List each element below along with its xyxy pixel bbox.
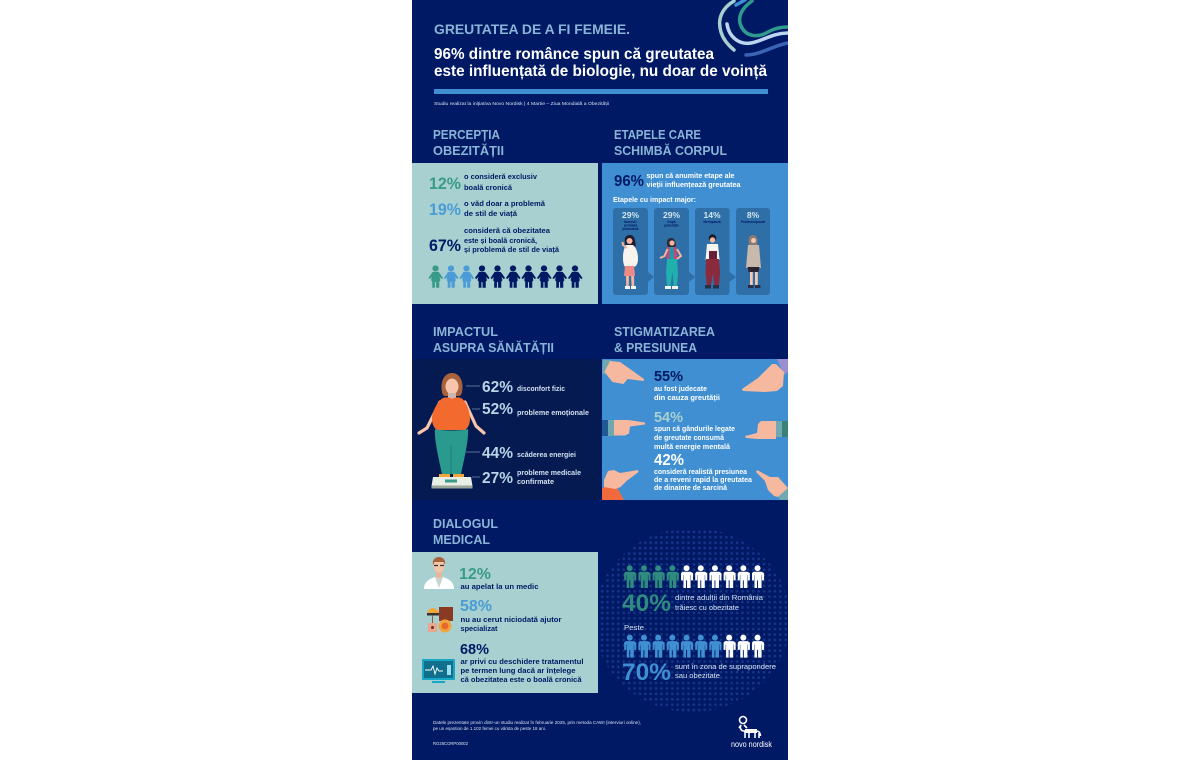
- card: dupa pubertate: După: [668, 220, 676, 224]
- stat 27%: confirmate: [517, 477, 554, 486]
- stat 42%: 42%: [654, 452, 684, 469]
- study note: Studiu realizat la inițiativa Novo Nordisk | 4 Martie – Ziua Mondială a Obezității: [434, 101, 609, 107]
- footer note: RO26CORP00002: [433, 741, 468, 747]
- hand middle right: [745, 421, 788, 439]
- title: GREUTATEA DE A FI FEMEIE.: [434, 22, 630, 37]
- figure: woman on scale: [419, 373, 484, 488]
- heading: impactul asupra sanatatii: IMPACTUL: [433, 324, 498, 339]
- card: menopauza: 14%: [703, 210, 721, 220]
- logo: novo nordisk: [731, 716, 773, 749]
- icon: food: [427, 607, 453, 632]
- stat block: 40% adults with obesity: [622, 565, 764, 617]
- connector lines: [466, 386, 480, 477]
- dotted globe background: [594, 528, 790, 712]
- card: dupa pubertate: 29%: [663, 210, 680, 220]
- stat block: over 70% overweight: 70%: [622, 659, 671, 686]
- panel: etapele: [602, 163, 788, 304]
- heading: etapele care schimba corpul: [614, 127, 727, 158]
- stat block: over 70% overweight: Peste: [624, 623, 644, 632]
- card: dupa pubertate: pubertate: [664, 224, 679, 228]
- stat 67%: [429, 226, 560, 255]
- logo: novo nordisk: novo nordisk: [731, 739, 773, 749]
- footer note: Datele prezentate provin dintr-un studiu realizat în februarie 2025, prin metoda CAWI (interviuri online),: [433, 720, 641, 726]
- stat 19%: 19%: [429, 201, 461, 219]
- stat 54%: multă energie mentală: [654, 442, 731, 451]
- card: sarcina: perioada: [624, 224, 637, 228]
- stat 54%: de greutate consumă: [654, 433, 725, 442]
- stat 68%: că obezitatea este o boală cronică: [460, 675, 582, 684]
- stat 12%: [459, 566, 538, 591]
- subheading: Etapele cu impact major:: [613, 195, 696, 204]
- people row: 4 of 10 green: [624, 565, 764, 588]
- heading: perceptia obezitatii: [433, 127, 504, 158]
- card: sarcina: [613, 208, 648, 295]
- figure: woman with book: [705, 234, 720, 288]
- stat block: 40% adults with obesity: trăiesc cu obezitate: [675, 603, 739, 612]
- stat 54%: [654, 409, 735, 451]
- stat 12%: 12%: [429, 175, 461, 193]
- people row: 7.5 of 10 blue: [624, 635, 764, 658]
- stat 42%: de dinainte de sarcină: [654, 483, 728, 492]
- stat 68%: ar privi cu deschidere tratamentul: [460, 657, 584, 666]
- stat 44%: 44%: [482, 445, 513, 462]
- stat 19%: de stil de viață: [464, 209, 518, 218]
- stat 67%: este și boală cronică,: [464, 236, 537, 245]
- heading: stigmatizarea si presiunea: STIGMATIZAREA: [614, 324, 715, 339]
- icon: doctor: [424, 557, 454, 589]
- card: sarcina: postnatală: [623, 227, 639, 231]
- stat 12%: boală cronică: [464, 183, 513, 192]
- stat 52%: 52%: [482, 401, 513, 418]
- stat 42%: [654, 452, 753, 492]
- heading: etapele care schimba corpul: ETAPELE CARE: [614, 127, 701, 142]
- headline: 96% dintre românce spun că greutatea: [434, 46, 714, 63]
- stat 52%: [482, 401, 589, 418]
- stat 68%: [460, 641, 584, 684]
- stat 27%: probleme medicale: [517, 468, 581, 477]
- stat 55%: [654, 368, 720, 402]
- people row: women: [428, 265, 582, 288]
- headline: [434, 46, 767, 80]
- heading: perceptia obezitatii: OBEZITĂȚII: [433, 143, 504, 158]
- stat 96%: [614, 171, 741, 190]
- background sheet: [412, 0, 788, 760]
- stat 27%: 27%: [482, 470, 513, 487]
- stat 62%: [482, 379, 565, 396]
- footer note: [433, 720, 641, 747]
- card: postmenopauza: [736, 208, 770, 295]
- panel: dialogul medical: [412, 552, 598, 693]
- stat 54%: spun că gândurile legate: [654, 424, 735, 433]
- panel: stigmatizarea: [602, 359, 788, 500]
- heading: perceptia obezitatii: PERCEPȚIA: [433, 127, 500, 142]
- stat 44%: [482, 445, 576, 462]
- connector chevrons between cards: [648, 272, 736, 282]
- card: menopauza: [695, 208, 730, 295]
- divider bar: [434, 89, 768, 94]
- card: postmenopauza: Postmenopauză: [741, 220, 765, 224]
- stat 44%: scăderea energiei: [517, 450, 576, 459]
- stat block: over 70% overweight: sau obezitate: [675, 671, 720, 680]
- stat 55%: au fost judecate: [654, 384, 707, 393]
- stat 42%: de a reveni rapid la greutatea: [654, 475, 753, 484]
- stat 62%: 62%: [482, 379, 513, 396]
- heading: stigmatizarea si presiunea: & PRESIUNEA: [614, 340, 697, 355]
- heading: dialogul medical: [433, 516, 498, 547]
- stat 67%: consideră că obezitatea: [464, 226, 551, 235]
- stat 12%: [429, 172, 538, 193]
- stat 96%: 96%: [614, 173, 644, 190]
- stat block: over 70% overweight: [623, 625, 776, 680]
- stat 55%: din cauza greutății: [654, 393, 720, 402]
- hand middle left: [602, 420, 645, 436]
- stat 68%: pe termen lung dacă ar înțelege: [460, 666, 576, 675]
- heading: stigmatizarea si presiunea: [614, 324, 715, 355]
- infographic: [412, 0, 788, 760]
- stat 27%: [482, 468, 581, 487]
- card: sarcina: Sarcină /: [624, 220, 637, 224]
- stat 52%: probleme emoționale: [517, 408, 589, 417]
- stat 58%: specializat: [460, 624, 498, 633]
- stat block: 40% adults with obesity: 40%: [622, 590, 671, 617]
- card: dupa pubertate: [654, 208, 689, 295]
- heading: dialogul medical: MEDICAL: [433, 532, 490, 547]
- icon: heart monitor: [422, 659, 455, 683]
- stat 58%: [460, 598, 562, 633]
- figure: pregnant woman: [622, 235, 638, 289]
- card: sarcina: 29%: [622, 210, 639, 220]
- decorative swirl logo: [720, 0, 788, 55]
- stat 12%: au apelat la un medic: [460, 582, 538, 591]
- heading: impactul asupra sanatatii: [433, 324, 554, 355]
- stat 96%: spun că anumite etape ale: [646, 171, 734, 180]
- figure: older woman: [746, 235, 761, 288]
- stat 67%: 67%: [429, 237, 461, 255]
- card: menopauza: Menopauză: [703, 220, 721, 224]
- stat 19%: [429, 199, 546, 219]
- heading: impactul asupra sanatatii: ASUPRA SĂNĂTĂȚII: [433, 340, 554, 355]
- heading: etapele care schimba corpul: SCHIMBĂ CORPUL: [614, 143, 727, 158]
- header: [434, 22, 768, 107]
- heading: dialogul medical: DIALOGUL: [433, 516, 498, 531]
- hand bottom left: [602, 470, 638, 500]
- stat 96%: vieții influențează greutatea: [646, 180, 741, 189]
- stat 68%: 68%: [460, 641, 489, 658]
- stat 19%: o văd doar a problemă: [464, 199, 546, 208]
- stat block: 40% adults with obesity: dintre adulții din România: [675, 593, 764, 602]
- headline: este influențată de biologie, nu doar de voință: [434, 63, 767, 80]
- stat 58%: 58%: [460, 598, 492, 615]
- stat 42%: consideră realistă presiunea: [654, 467, 748, 476]
- hand top left: [602, 360, 644, 384]
- hand top right: [742, 359, 788, 392]
- card: postmenopauza: 8%: [747, 210, 760, 220]
- stat 62%: disconfort fizic: [517, 384, 565, 393]
- panel: perceptia obezitatii: [412, 163, 598, 304]
- hand bottom right: [756, 470, 788, 500]
- figure: teenage girl: [660, 238, 681, 289]
- stat 12%: 12%: [459, 566, 491, 583]
- stat 12%: o consideră exclusiv: [464, 172, 538, 181]
- footer note: pe un eșantion de 1.102 femei cu vârsta de peste 18 ani.: [433, 726, 546, 732]
- panel: impactul asupra sanatatii: [412, 359, 600, 500]
- stat 67%: și problemă de stil de viață: [464, 245, 560, 254]
- stat block: over 70% overweight: sunt în zona de suprapondere: [675, 662, 776, 671]
- stat 55%: 55%: [654, 368, 683, 385]
- stat 54%: 54%: [654, 409, 683, 426]
- stat 58%: nu au cerut niciodată ajutor: [460, 615, 562, 624]
